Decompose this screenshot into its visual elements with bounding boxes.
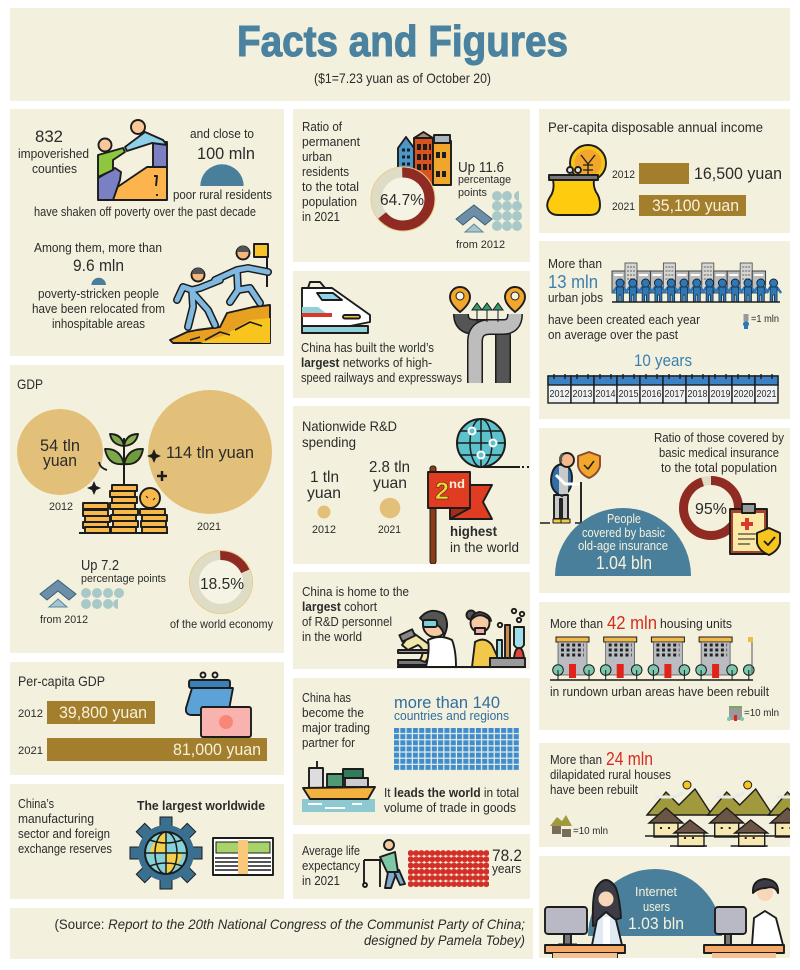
text: 9.6 mln relocated: have been relocated from [32, 301, 165, 316]
text: 9.6 mln relocated: poverty-stricken people [38, 286, 159, 301]
text: manufacturing sector: manufacturing [18, 811, 94, 826]
text: up 11.6 percentage points: points [458, 187, 487, 199]
title: Facts and Figures [237, 17, 568, 66]
text: average life expectancy: in 2021 [302, 873, 340, 888]
icon: scientists in a lab [397, 609, 526, 667]
timeline: calendar years: 2016 [642, 389, 662, 400]
panel: R&D personnel [293, 572, 530, 669]
semicircle: old-age insurance 1.04 bln [555, 508, 691, 576]
bar: 2012 [18, 701, 155, 724]
timeline: calendar years: 2019 [710, 389, 731, 400]
text: 9.6 mln relocated: inhospitable areas [52, 316, 145, 331]
icon: up arrow [40, 580, 76, 607]
text: more than 42 mln housing units: 42 mln [607, 613, 657, 633]
text: more than 42 mln housing units [550, 613, 732, 633]
text: up 7.2 percentage points: percentage points [81, 573, 166, 585]
bubble: 2012 GDP: 54 tln [40, 436, 80, 455]
semicircle: internet users 1.03 bln [588, 869, 722, 936]
pictogram: 140 squares [394, 728, 520, 771]
icon: expressway with location pins [450, 287, 525, 383]
text: created each year: have been created each year [548, 312, 701, 327]
panel: life expectancy [293, 834, 530, 899]
semicircle: old-age insurance 1.04 bln: People [607, 511, 641, 526]
timeline: calendar years: 2012 [550, 389, 570, 400]
semicircle: old-age insurance 1.04 bln: old-age insurance [578, 538, 668, 553]
text: major trading partner: become the [302, 705, 364, 720]
donut: 64.7% [371, 167, 435, 231]
text: ratio covered by medical insurance: Ratio of those covered by [654, 430, 784, 445]
legend: =10 mln: =10 mln [573, 826, 608, 837]
text: 78.2 years [492, 846, 522, 876]
donut: 18.5% of world economy [189, 550, 253, 614]
heading: nationwide R&D spending [302, 418, 397, 450]
icon: elderly man with cane and shield [540, 452, 603, 523]
panel: urban jobs [539, 241, 790, 419]
text: shaken off poverty: have shaken off poverty over the past decade [34, 204, 256, 219]
text: 832 impoverished counties: impoverished [18, 146, 89, 161]
text: 9.6 mln relocated: 9.6 mln [73, 256, 124, 275]
bar: 2012 income: 16,500 yuan [694, 164, 782, 183]
text: manufacturing sector: exchange reserves [18, 841, 112, 856]
subtitle: ($1=7.23 yuan as of October 20) [314, 70, 491, 86]
text: 9.6 mln relocated: Among them, more than [34, 240, 162, 255]
timeline: calendar years: 2013 [572, 389, 593, 400]
text: highest in the world: highest [450, 523, 497, 539]
bubble: 2021 GDP: 2021 [197, 521, 221, 533]
text: more than 24 mln: 24 mln [606, 749, 653, 769]
text: largest cohort: of R&D personnel [302, 614, 392, 629]
icon: elderly person with walker [363, 840, 405, 888]
bar: 2012: 39,800 yuan [59, 703, 147, 722]
timeline: calendar years [548, 374, 778, 403]
text: ratio covered by medical insurance [654, 430, 784, 475]
text: the largest worldwide: The largest worldwide [137, 798, 265, 813]
icon: coin stacks with plant [79, 434, 168, 533]
text: more than 24 mln: dilapidated rural houses [550, 767, 671, 782]
text: ratio of permanent urban residents: population [302, 194, 357, 209]
timeline: calendar years: 2021 [756, 389, 777, 400]
icon: second-place flag [428, 466, 492, 564]
text: average life expectancy [302, 843, 360, 888]
bubble: 2012 R&D: yuan [307, 485, 341, 502]
bubble: 2021 R&D: yuan [373, 475, 407, 492]
bar: 2021: 2021 [18, 745, 43, 757]
text: more than 42 mln housing units: housing units [660, 616, 732, 631]
text: close to 100 mln: and close to [190, 126, 254, 141]
text: up 11.6 percentage points [458, 159, 511, 199]
text: 10 years: 10 years [634, 351, 692, 370]
text: ratio of permanent urban residents: permanent [302, 134, 360, 149]
icon: banknote stack [213, 838, 273, 875]
bar: 2021 income [612, 195, 746, 216]
text: major trading partner: major trading [302, 720, 370, 735]
text: largest cohort: largest cohort [302, 599, 377, 614]
text: source credit: designed by Pamela Tobey) [364, 932, 525, 948]
text: leads the world in trade: volume of trade in goods [384, 800, 516, 815]
bubble: 2021 GDP [148, 390, 272, 533]
text: major trading partner [302, 690, 370, 750]
text: ratio of permanent urban residents: to the total [302, 179, 359, 194]
text: of the world economy: of the world economy [170, 617, 273, 631]
text: up 7.2 percentage points [81, 557, 166, 585]
bar: 2021 income: 2021 [612, 201, 635, 213]
bubble: 2012 GDP: yuan [43, 451, 77, 470]
timeline: calendar years: 2015 [618, 389, 639, 400]
text: source credit [54, 916, 525, 948]
semicircle: old-age insurance 1.04 bln: covered by basic [582, 525, 665, 540]
text: close to 100 mln [190, 126, 255, 163]
panel: title [10, 8, 790, 101]
text: ratio of permanent urban residents: residents [302, 164, 349, 179]
timeline: calendar years: 2017 [664, 389, 685, 400]
semicircle: internet users 1.03 bln: users [643, 899, 670, 914]
text: ratio of permanent urban residents [302, 119, 360, 224]
text: more than 24 mln: More than [550, 752, 602, 767]
text: manufacturing sector [18, 796, 112, 856]
text: more than 13 mln urban jobs: 13 mln [548, 272, 598, 292]
bubble: 2012 GDP: 2012 [49, 501, 73, 513]
text: railways and expressways: China has built the world’s [301, 340, 434, 355]
pictogram: crowd of workers and city [612, 263, 781, 302]
text: in rundown urban areas: in rundown urban areas have been rebuilt [550, 684, 769, 699]
panel: disposable income [539, 109, 790, 233]
text: more than 13 mln urban jobs: urban jobs [548, 290, 603, 305]
text: up 11.6 percentage points: percentage [458, 174, 511, 186]
heading: nationwide R&D spending: Nationwide R&D [302, 418, 397, 434]
bubble: 2012 R&D: 1 tln [310, 469, 339, 486]
icon: medical clipboard with shield [730, 504, 780, 555]
text: more than 24 mln [550, 749, 671, 797]
donut: 95%: 95% [695, 501, 727, 518]
icon: yuan coin and pouch [547, 145, 606, 215]
text: 832 impoverished counties [18, 127, 89, 176]
legend: =10 mln [550, 815, 608, 837]
text: from 2012: from 2012 [40, 614, 88, 626]
semicircle: internet users 1.03 bln: 1.03 bln [628, 914, 684, 933]
icon: man at computer [704, 879, 784, 958]
icon: second-place flag: 2 [435, 478, 449, 505]
text: railways and expressways [301, 340, 462, 385]
text: major trading partner: partner for [302, 735, 356, 750]
icon: purse and banknote [186, 672, 251, 737]
panel: source [10, 908, 533, 959]
text: largest cohort [302, 584, 409, 644]
pictogram: percentage-point dots [81, 588, 124, 609]
panel: manufacturing and forex reserves [10, 784, 284, 899]
legend: =1 mln: =1 mln [751, 314, 779, 325]
text: created each year [548, 312, 701, 342]
text: largest cohort: China is home to the [302, 584, 409, 599]
text: highest in the world [450, 523, 519, 555]
semicircle: 100 mln [200, 164, 244, 186]
pictogram: apartment buildings [550, 637, 754, 680]
text: manufacturing sector: sector and foreign [18, 826, 110, 841]
text: ratio of permanent urban residents: Ratio of [302, 119, 342, 134]
bubble: 2021 R&D [369, 459, 410, 536]
heading: per-capita disposable annual income: Per-capita disposable annual income [548, 119, 763, 135]
text: up 7.2 percentage points: Up 7.2 [81, 557, 119, 574]
text: more than 140 countries and regions: countries and regions [394, 708, 509, 723]
text: largest cohort: in the world [302, 629, 362, 644]
timeline: calendar years: 2020 [734, 389, 754, 400]
icon: helping hand climbers [98, 120, 167, 200]
bubble: 2021 R&D: 2.8 tln [369, 459, 410, 476]
icon: up arrow [456, 205, 492, 232]
bar: 2012: 2012 [18, 708, 43, 720]
panel: per-capita GDP [10, 662, 284, 775]
text: ratio covered by medical insurance: to the total population [661, 460, 777, 475]
donut: 18.5% of world economy: 18.5% [200, 576, 244, 593]
bar: 2012 income: 2012 [612, 169, 635, 181]
icon: city buildings [398, 132, 451, 185]
heading: nationwide R&D spending: spending [302, 434, 356, 450]
bar: 2012 income [612, 163, 782, 184]
panel: urban residents ratio [293, 109, 530, 262]
legend: =10 mln [727, 706, 779, 721]
text: highest in the world: in the world [450, 539, 519, 555]
panel: trade [293, 678, 530, 825]
text: 832 impoverished counties: 832 [35, 127, 63, 146]
text: close to 100 mln: 100 mln [197, 144, 255, 163]
donut: 64.7%: 64.7% [380, 192, 424, 209]
bubble: 2012 R&D: 2012 [312, 524, 336, 536]
panel: rebuilt housing units [539, 602, 790, 730]
text: up 11.6 percentage points: Up 11.6 [458, 159, 504, 176]
text: more than 13 mln urban jobs: More than [548, 256, 602, 271]
text: ratio of permanent urban residents: urban [302, 149, 332, 164]
panel: R&D spending [293, 406, 530, 564]
heading: GDP: GDP [17, 376, 43, 392]
text: average life expectancy: Average life [302, 843, 360, 858]
panel: insurance [539, 428, 790, 593]
pictogram: red dots [408, 850, 489, 887]
text: ratio covered by medical insurance: basic medical insurance [659, 445, 779, 460]
text: leads the world in trade [384, 785, 519, 815]
icon: high-speed train [302, 282, 370, 333]
bubble: 2021 GDP: 114 tln yuan [166, 443, 254, 462]
text: railways and expressways: speed railways and expressways [301, 370, 462, 385]
icon: second-place flag: nd [449, 477, 465, 491]
donut: 95% [684, 480, 738, 536]
text: average life expectancy: expectancy [302, 858, 360, 873]
legend: =1 mln [743, 314, 779, 329]
pictogram: rural village [645, 781, 800, 847]
icon: gear globe [130, 817, 202, 889]
semicircle: internet users 1.03 bln: Internet [635, 884, 677, 899]
icon: mountain climbers [170, 244, 270, 343]
text: major trading partner: China has [302, 690, 351, 705]
text: 78.2 years: 78.2 [492, 846, 522, 865]
panel: poverty alleviation [10, 109, 284, 356]
icon: globe [457, 419, 529, 467]
panel: railways and expressways [293, 271, 530, 398]
timeline: calendar years: 2014 [596, 389, 616, 400]
panel: GDP [10, 365, 284, 653]
icon: woman at computer [545, 880, 625, 958]
bar: 2021: 81,000 yuan [173, 740, 261, 759]
text: source credit: (Source: Report to the 20th National Congress of the Communist Party of China; [54, 916, 525, 932]
text: more than 13 mln urban jobs [548, 256, 603, 305]
text: created each year: on average over the past [548, 327, 678, 342]
text: more than 24 mln: have been rebuilt [550, 782, 638, 797]
heading: per-capita GDP: Per-capita GDP [18, 673, 105, 689]
text: more than 140 countries and regions [394, 693, 509, 723]
text: poor rural residents: poor rural residents [173, 187, 272, 202]
pictogram: percentage-point dots [492, 191, 522, 231]
text: from 2012: from 2012 [456, 239, 505, 251]
bubble: 2012 R&D [307, 469, 341, 536]
icon: cargo ship [302, 761, 375, 812]
timeline: calendar years: 2018 [688, 389, 708, 400]
bar: 2021 income: 35,100 yuan [652, 196, 739, 215]
text: more than 140 countries and regions: more than 140 [394, 693, 500, 712]
text: railways and expressways: largest networks of high- [301, 355, 432, 370]
text: 832 impoverished counties: counties [32, 161, 77, 176]
text: manufacturing sector: China’s [18, 796, 54, 811]
semicircle: old-age insurance 1.04 bln: 1.04 bln [596, 553, 652, 573]
bar: 2021 [18, 738, 267, 761]
bubble: 2021 R&D: 2021 [378, 524, 401, 536]
legend: =10 mln: =10 mln [744, 708, 779, 719]
text: 9.6 mln relocated [32, 240, 165, 331]
panel: internet users [539, 856, 790, 958]
bubble: 2012 GDP [17, 409, 103, 513]
text: more than 42 mln housing units: More than [550, 616, 603, 631]
text: 78.2 years: years [492, 861, 521, 876]
text: leads the world in trade: It leads the world in total [384, 785, 519, 800]
text: ratio of permanent urban residents: in 2021 [302, 209, 340, 224]
panel: rural houses [539, 743, 800, 847]
